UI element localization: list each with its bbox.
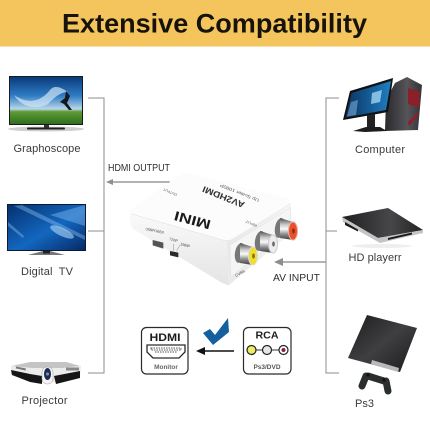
checkmark icon [203, 318, 229, 345]
device label: 720P: 720P [169, 237, 179, 243]
HDMI text: HDMI [150, 332, 180, 344]
left connector bracket [88, 98, 104, 373]
HDMI monitor card [142, 328, 188, 374]
box body [130, 210, 229, 285]
label: Graphoscope: Graphoscope [14, 143, 80, 155]
icon: PS3 console and controller [348, 315, 417, 391]
icon: digital TV [7, 204, 86, 255]
label: Computer: Computer [355, 144, 405, 156]
label: Ps3: Ps3 [355, 398, 374, 410]
title: Extensive Compatibility [62, 8, 367, 38]
label: HD player: HD playerr [348, 252, 402, 264]
label: AV INPUT: AV INPUT [273, 272, 321, 284]
signal direction arrow [196, 347, 234, 355]
Monitor text: Monitor [154, 364, 178, 371]
header band [0, 0, 430, 46]
device label: CVBS: CVBS [234, 269, 246, 278]
right connector bracket [326, 98, 339, 373]
label: HDMI OUTPUT: HDMI OUTPUT [108, 162, 170, 174]
label: Digital TV: Digital TV [21, 266, 74, 278]
icon: computer [343, 77, 422, 132]
label: Projector: Projector [22, 395, 68, 407]
device label: output: OUTPUT [162, 187, 178, 197]
AV input arrow [274, 258, 326, 266]
RCA card [244, 328, 291, 374]
converter box [130, 173, 298, 285]
switch [170, 244, 180, 257]
icon: HD player [342, 208, 423, 248]
device label: 1080P: 1080P [180, 242, 191, 249]
icon: HDMI port [147, 345, 185, 358]
side port panel [230, 207, 291, 277]
RCA jack: red [273, 217, 298, 240]
RCA connectors [255, 349, 282, 351]
device label: MINI: MINI [172, 208, 212, 232]
usb port [153, 240, 163, 249]
RCA jack: white [253, 230, 278, 253]
device label: input: INPUT [244, 219, 258, 228]
device label: Full HD: Up Scaler 1080P [219, 183, 260, 203]
RCA jack: yellow [233, 242, 258, 265]
HDMI output arrow [106, 179, 170, 185]
Ps3/DVD text: Ps3/DVD [253, 364, 281, 371]
device label: usb power: USB/POWER [145, 227, 164, 235]
RCA text: RCA [256, 330, 279, 342]
icon: projector [11, 362, 81, 384]
icon: graphoscope TV [8, 76, 84, 132]
device label: AV2HDMI: AV2HDMI [201, 184, 246, 210]
